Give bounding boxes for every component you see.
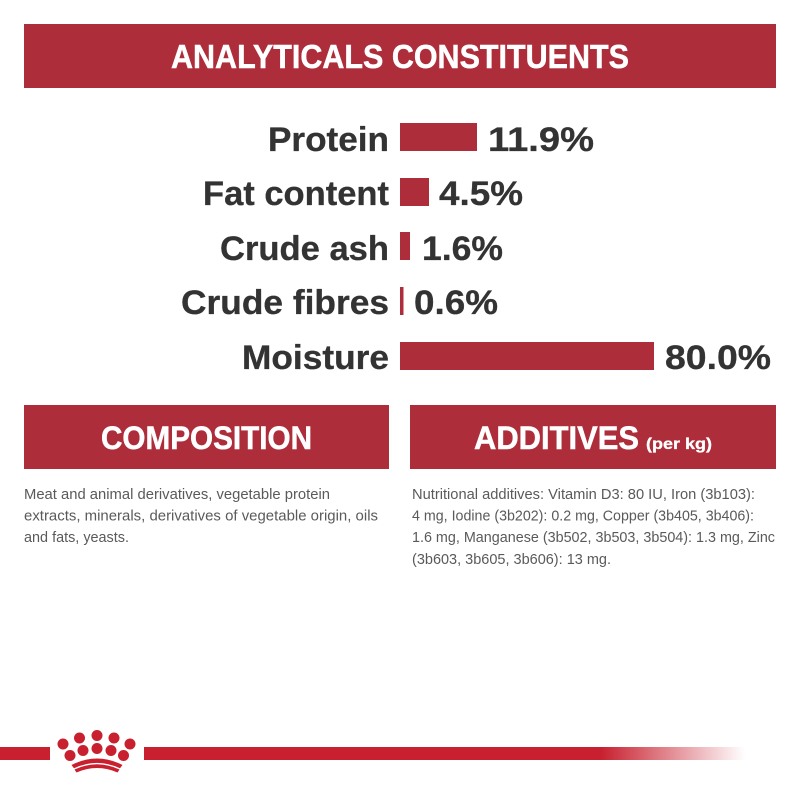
additives text xyxy=(412,486,775,568)
row: crude fibres: Crude fibres xyxy=(181,284,389,322)
additives heading xyxy=(410,405,776,469)
row: fat content xyxy=(203,175,523,213)
additives text: 1.6 mg, Manganese (3b502, 3b503, 3b504): 1.3 mg, Zinc xyxy=(412,529,775,546)
composition text: extracts, minerals, derivatives of vegetable origin, oils xyxy=(24,508,378,524)
row: protein xyxy=(268,121,594,159)
row: crude ash: 1.6% xyxy=(422,230,503,268)
title banner xyxy=(24,24,776,88)
row: crude fibres xyxy=(181,284,498,322)
composition heading xyxy=(24,405,389,469)
row: crude ash: Crude ash xyxy=(220,230,389,268)
additives heading: ADDITIVES xyxy=(474,420,639,456)
icon: crown logo xyxy=(58,730,136,772)
bar chart: constituents xyxy=(181,121,771,377)
row: crude fibres: 0.6% xyxy=(414,284,498,322)
row: moisture: Moisture xyxy=(242,339,389,377)
row: protein: 11.9% xyxy=(488,121,594,159)
composition text xyxy=(24,486,378,546)
composition heading: COMPOSITION xyxy=(101,420,312,456)
footer line left xyxy=(0,747,50,760)
title banner: ANALYTICALS CONSTITUENTS xyxy=(171,38,629,75)
row: fat content: Fat content xyxy=(203,175,389,213)
row: protein: Protein xyxy=(268,121,389,159)
row: moisture: 80.0% xyxy=(665,339,771,377)
composition text: Meat and animal derivatives, vegetable protein xyxy=(24,486,330,503)
footer line right xyxy=(144,747,745,760)
additives heading: (per kg) xyxy=(646,436,712,453)
additives text: 4 mg, Iodine (3b202): 0.2 mg, Copper (3b405, 3b406): xyxy=(412,508,754,524)
row: moisture xyxy=(242,339,771,377)
composition text: and fats, yeasts. xyxy=(24,529,129,546)
additives text: (3b603, 3b605, 3b606): 13 mg. xyxy=(412,551,611,568)
additives text: Nutritional additives: Vitamin D3: 80 IU, Iron (3b103): xyxy=(412,486,755,503)
row: crude ash xyxy=(220,230,503,268)
row: fat content: 4.5% xyxy=(439,175,523,213)
